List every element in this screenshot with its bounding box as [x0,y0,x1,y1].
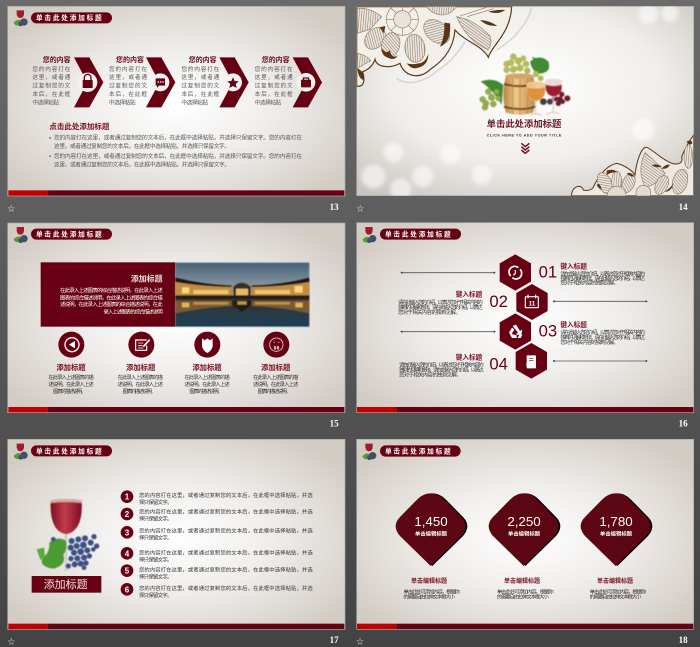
stat 1: 单击编辑标题 [415,529,448,537]
item 01: 键入标题 [560,262,587,271]
column 2: 图表的描述说明。 [123,387,156,395]
bokeh lights [361,4,679,200]
stat 2: 单击编辑标题 [504,577,540,585]
page number 15: 15 [330,419,339,429]
banner text panel: 录入上述图表的综合描述说明 [103,307,163,315]
lower text block: 这里，或者通过复制您的文本后，在此框中选择粘贴，并选择只保留文字。 [54,160,230,168]
step 1: 中选择粘贴 [32,99,59,107]
icon: red glass [545,79,562,114]
step 4: 这里，或者通 [255,73,293,81]
stat 2: 单击此处可添加内容，根据你 [497,587,554,595]
star mark: ☆ [8,204,16,213]
item 03: 独到的见解和想法。请在此输入您的介绍，以表达 [560,333,646,341]
item 02: 请在此输入您的介绍，以表达您对于相关内容的 [398,298,483,306]
leader line [401,331,495,333]
item 03: 您对于相关内容的独到见解。 [560,338,619,346]
icon: circled arrow [65,338,79,352]
column 2: 在此录入上述图表的描 [118,373,164,381]
banner text panel: 添加标题 [131,274,163,284]
footer bar [8,190,344,196]
banner text panel: 在此录入上述图表的综合描述说明，在此录入上述 [60,286,163,294]
step 1: 过复制您的文 [32,81,71,89]
list item 4: 您的内容打在这里，或者通过复制您的文本后，在此框中选择粘贴，并选 [139,548,313,556]
step 3: 这里，或者通 [181,73,220,81]
list item 6 [121,583,313,599]
list item 6: 6 [125,585,130,594]
step 1: 您的内容 [43,55,71,64]
stat 3: 单击编辑标题 [600,529,633,537]
stat 1: 单击编辑标题 [411,577,447,585]
step 1: 本后，在此框 [32,90,71,98]
icon: green grapes left [480,89,501,110]
step 2: 这里，或者通 [109,73,147,81]
icon: clock face [270,338,283,351]
item 04: 04 [489,355,508,374]
item 02: 独到的见解和想法。请在此输入您的介绍，以表达 [398,303,483,311]
title pill [31,12,112,23]
banner text panel: 图表的综合描述说明，在此录入上述图表的综合描 [60,293,163,301]
step 3: 中选择粘贴 [181,99,208,107]
icon: recycle [509,325,522,338]
column 4: 添加标题 [261,363,291,372]
list item 2: 择只保留文字。 [139,514,172,522]
step 2 [109,55,175,107]
stat 2: 的需要自由拉伸文本框大小 [497,592,549,600]
column 4: 述说明，在此录入上述 [253,380,299,388]
icon: green grapes top [504,54,543,81]
list item 3 [121,526,313,541]
stat 3: 的需要自由拉伸文本框大小 [590,592,642,600]
footer bar [357,407,693,412]
stat 2: 2,250 [507,514,541,529]
stat 1 [396,493,467,600]
item 04 [399,343,647,379]
page number 14: 14 [679,202,688,212]
step 4: 中选择粘贴 [255,99,282,107]
title pill [31,445,112,456]
page number 16: 16 [679,419,688,429]
icon: notebook [526,355,536,368]
icon: calendar: 11 [529,302,536,308]
logo: wine glass and grapes [362,227,376,243]
list item 1 [121,490,313,506]
step 3: 过复制您的文 [181,81,220,89]
icon: briefcase [301,78,311,87]
leader line [553,360,647,362]
item 02 [398,284,647,320]
icon: note and pen [136,340,150,350]
stat 3: 1,780 [599,514,633,529]
page number 17: 17 [330,635,339,645]
icon: red grapes [540,92,570,106]
title pill: 单击此处添加标题 [385,446,451,455]
slide 14 title: 单击此处添加标题 [487,118,562,129]
stat 2 [489,493,560,600]
list item 1: 1 [125,493,130,502]
step 2: 您的内容打在 [109,65,147,73]
item 01: 01 [539,262,557,281]
icon: vine leaf [37,539,67,568]
list item 3: 3 [125,528,130,537]
column 4 [253,332,299,395]
caption label: 添加标题 [44,577,88,591]
icon: leaves [481,57,549,105]
stat 3: 单击此处可添加内容，根据你 [590,587,647,595]
item 01: 独到的见解和想法。请在此输入您的介绍，以表达 [560,274,646,282]
step 4: 您的内容打在 [255,65,293,73]
title pill [380,445,461,457]
step 4 [255,55,322,107]
star mark: ☆ [8,637,16,646]
list item 1: 您的内容打在这里，或者通过复制您的文本后，在此框中选择粘贴，并选 [139,491,313,499]
stat 1: 1,450 [414,514,448,529]
item 01: 您对于相关内容的独到见解。 [560,279,619,287]
logo: wine glass and grapes [14,227,28,243]
step 2: 中选择粘贴 [109,99,136,107]
step 3: 本后，在此框 [181,90,220,98]
title pill [31,229,112,240]
step 2: 过复制您的文 [109,81,147,89]
icon: chevrons down [521,143,529,153]
icon: shield [202,338,213,353]
leader line [401,272,495,274]
stat 3: 单击编辑标题 [597,577,633,585]
footer bar [8,624,344,629]
slide 18: three number diamonds [356,439,694,646]
list item 5 [121,564,313,581]
item 01 [401,254,646,291]
slide 16: hexagon timeline [357,223,694,429]
lace flower bottom right [570,134,694,196]
column 4: 图表的描述说明。 [258,387,291,395]
list item 4: 4 [125,549,130,558]
item 02: 您对于相关内容的独到见解。 [398,308,461,316]
list item 4 [121,547,313,563]
column 3 [184,332,230,395]
footer bar [357,624,693,629]
caption label [32,576,101,593]
banner text panel: 述说明，在此录入上述图表的综合描述说明，在此 [60,300,163,308]
step 4: 您的内容 [262,55,290,64]
icon: wine glass [51,499,82,571]
column 2 [118,332,164,395]
illustration: barrel, grapes and wine glasses [480,54,570,115]
list item 2: 您的内容打在这里，或者通过复制您的文本后，在此框中选择粘贴，并选 [139,507,313,515]
icon: calendar [525,295,538,308]
lower text block [49,121,302,168]
step 3 [181,55,249,107]
column 3: 添加标题 [192,363,222,372]
stat 3 [581,493,652,600]
slide 14: section cover [357,3,694,213]
page number 13: 13 [330,202,339,212]
lace flower top left [357,3,532,86]
star mark: ☆ [356,637,364,646]
lower text block: 这里，或者通过复制您的文本后，在此框中选择粘贴，并选择只保留文字。 [54,142,230,150]
lace petals [360,15,491,60]
icon: lock [83,74,93,88]
icon: refresh clock [509,266,522,279]
step 2: 您的内容 [116,55,144,64]
list item 4: 择只保留文字。 [139,555,172,563]
slide 14 subtitle: CLICK HERE TO ADD YOUR TITLE [487,133,562,137]
step 3: 您的内容 [189,55,217,64]
icon: star [227,77,239,88]
column 2: 述说明，在此录入上述 [118,380,164,388]
stat 1: 单击此处可添加内容，根据你 [403,587,461,595]
lace dark scallops [597,140,692,192]
slide 17: numbered list with wine glass [8,439,345,646]
footer bar [8,407,344,412]
column 1: 图表的描述说明。 [53,387,86,395]
step 4: 过复制您的文 [255,81,293,89]
list item 3: 您的内容打在这里，或者通过复制您的文本后，在此框中选择粘贴，并选 [139,526,313,534]
item 04: 键入标题 [456,352,483,361]
lower text block: 点击此处添加标题 [49,121,110,131]
lower text block: 您的内容打在这里，或者通过复制您的文本后，在此框中选择粘贴，并选择只保留文字。您的内容打在 [54,134,302,142]
list item 5: 5 [125,567,130,576]
column 1: 添加标题 [56,363,86,372]
item 03: 03 [539,322,557,341]
column 1: 在此录入上述图表的描 [48,373,94,381]
logo: wine glass and grapes [14,10,28,26]
step 1: 您的内容打在 [32,65,71,73]
logo: wine glass and grapes [14,444,28,460]
icon: chat bubble [156,78,165,88]
column 3: 在此录入上述图表的描 [184,373,230,381]
lace petals [594,153,690,196]
item 04: 独到的见解和想法。请在此输入您的介绍，以表达 [399,365,484,373]
item 03 [401,313,646,350]
step 1 [32,55,103,107]
icon: barrel [503,73,535,115]
illustration: wine glass with grapes [37,499,99,571]
list item 3: 择只保留文字。 [139,533,172,541]
lace dark scallops [357,10,505,80]
column 3: 图表的描述说明。 [189,387,223,395]
title pill: 单击此处添加标题 [36,13,102,22]
slide 15: photo banner and four columns [8,223,345,429]
list item 5: 您的内容打在这里，或者通过复制您的文本后，在此框中选择粘贴，并选 [139,566,313,574]
item 01: 请在此输入您的介绍，以表达您对于相关内容的 [560,269,645,277]
item 02: 键入标题 [456,290,483,299]
column 3: 述说明，在此录入上述 [184,380,230,388]
logo: wine glass and grapes [362,444,376,460]
stat 1: 的需要自由拉伸文本框大小 [403,592,456,600]
step 3: 您的内容打在 [181,65,220,73]
column 4: 在此录入上述图表的描 [253,373,299,381]
column 2: 添加标题 [126,363,156,372]
column 1: 述说明，在此录入上述 [48,380,94,388]
icon: grape cluster [51,534,99,570]
item 04: 您对于相关内容的独到见解。 [399,370,462,378]
step 1: 这里，或者通 [32,73,71,81]
item 03: 键入标题 [560,320,587,329]
stat 2: 单击编辑标题 [508,529,541,537]
column 1 [48,332,94,395]
title pill [380,229,461,240]
list item 6: 择只保留文字。 [139,591,172,599]
item 03: 请在此输入您的介绍，以表达您对于相关内容的 [560,328,645,336]
list item 5: 择只保留文字。 [139,573,172,581]
star mark: ☆ [357,204,365,213]
leader line [553,300,647,302]
list item 2 [121,507,313,522]
list item 2: 2 [125,510,130,519]
banner photo: palace reflected in water [175,263,309,327]
list item 1: 择只保留文字。 [139,498,172,506]
item 02: 02 [489,292,508,311]
title pill: 单击此处添加标题 [36,446,102,455]
list item 6: 您的内容打在这里，或者通过复制您的文本后，在此框中选择粘贴，并选 [139,584,313,592]
slide 13: process chevrons [8,6,345,213]
title pill: 单击此处添加标题 [36,230,102,239]
step 2: 本后，在此框 [109,90,147,98]
icon: amber glass [527,81,545,115]
banner text panel [41,262,175,327]
title pill: 单击此处添加标题 [385,230,451,239]
lower text block: 您的内容打在这里，或者通过复制您的文本后，在此框中选择粘贴，并选择只保留文字。您的内容打在 [54,152,302,160]
step 4: 本后，在此框 [255,90,293,98]
page number 18: 18 [679,635,688,645]
item 04: 请在此输入您的介绍，以表达您对于相关内容的 [399,360,484,368]
